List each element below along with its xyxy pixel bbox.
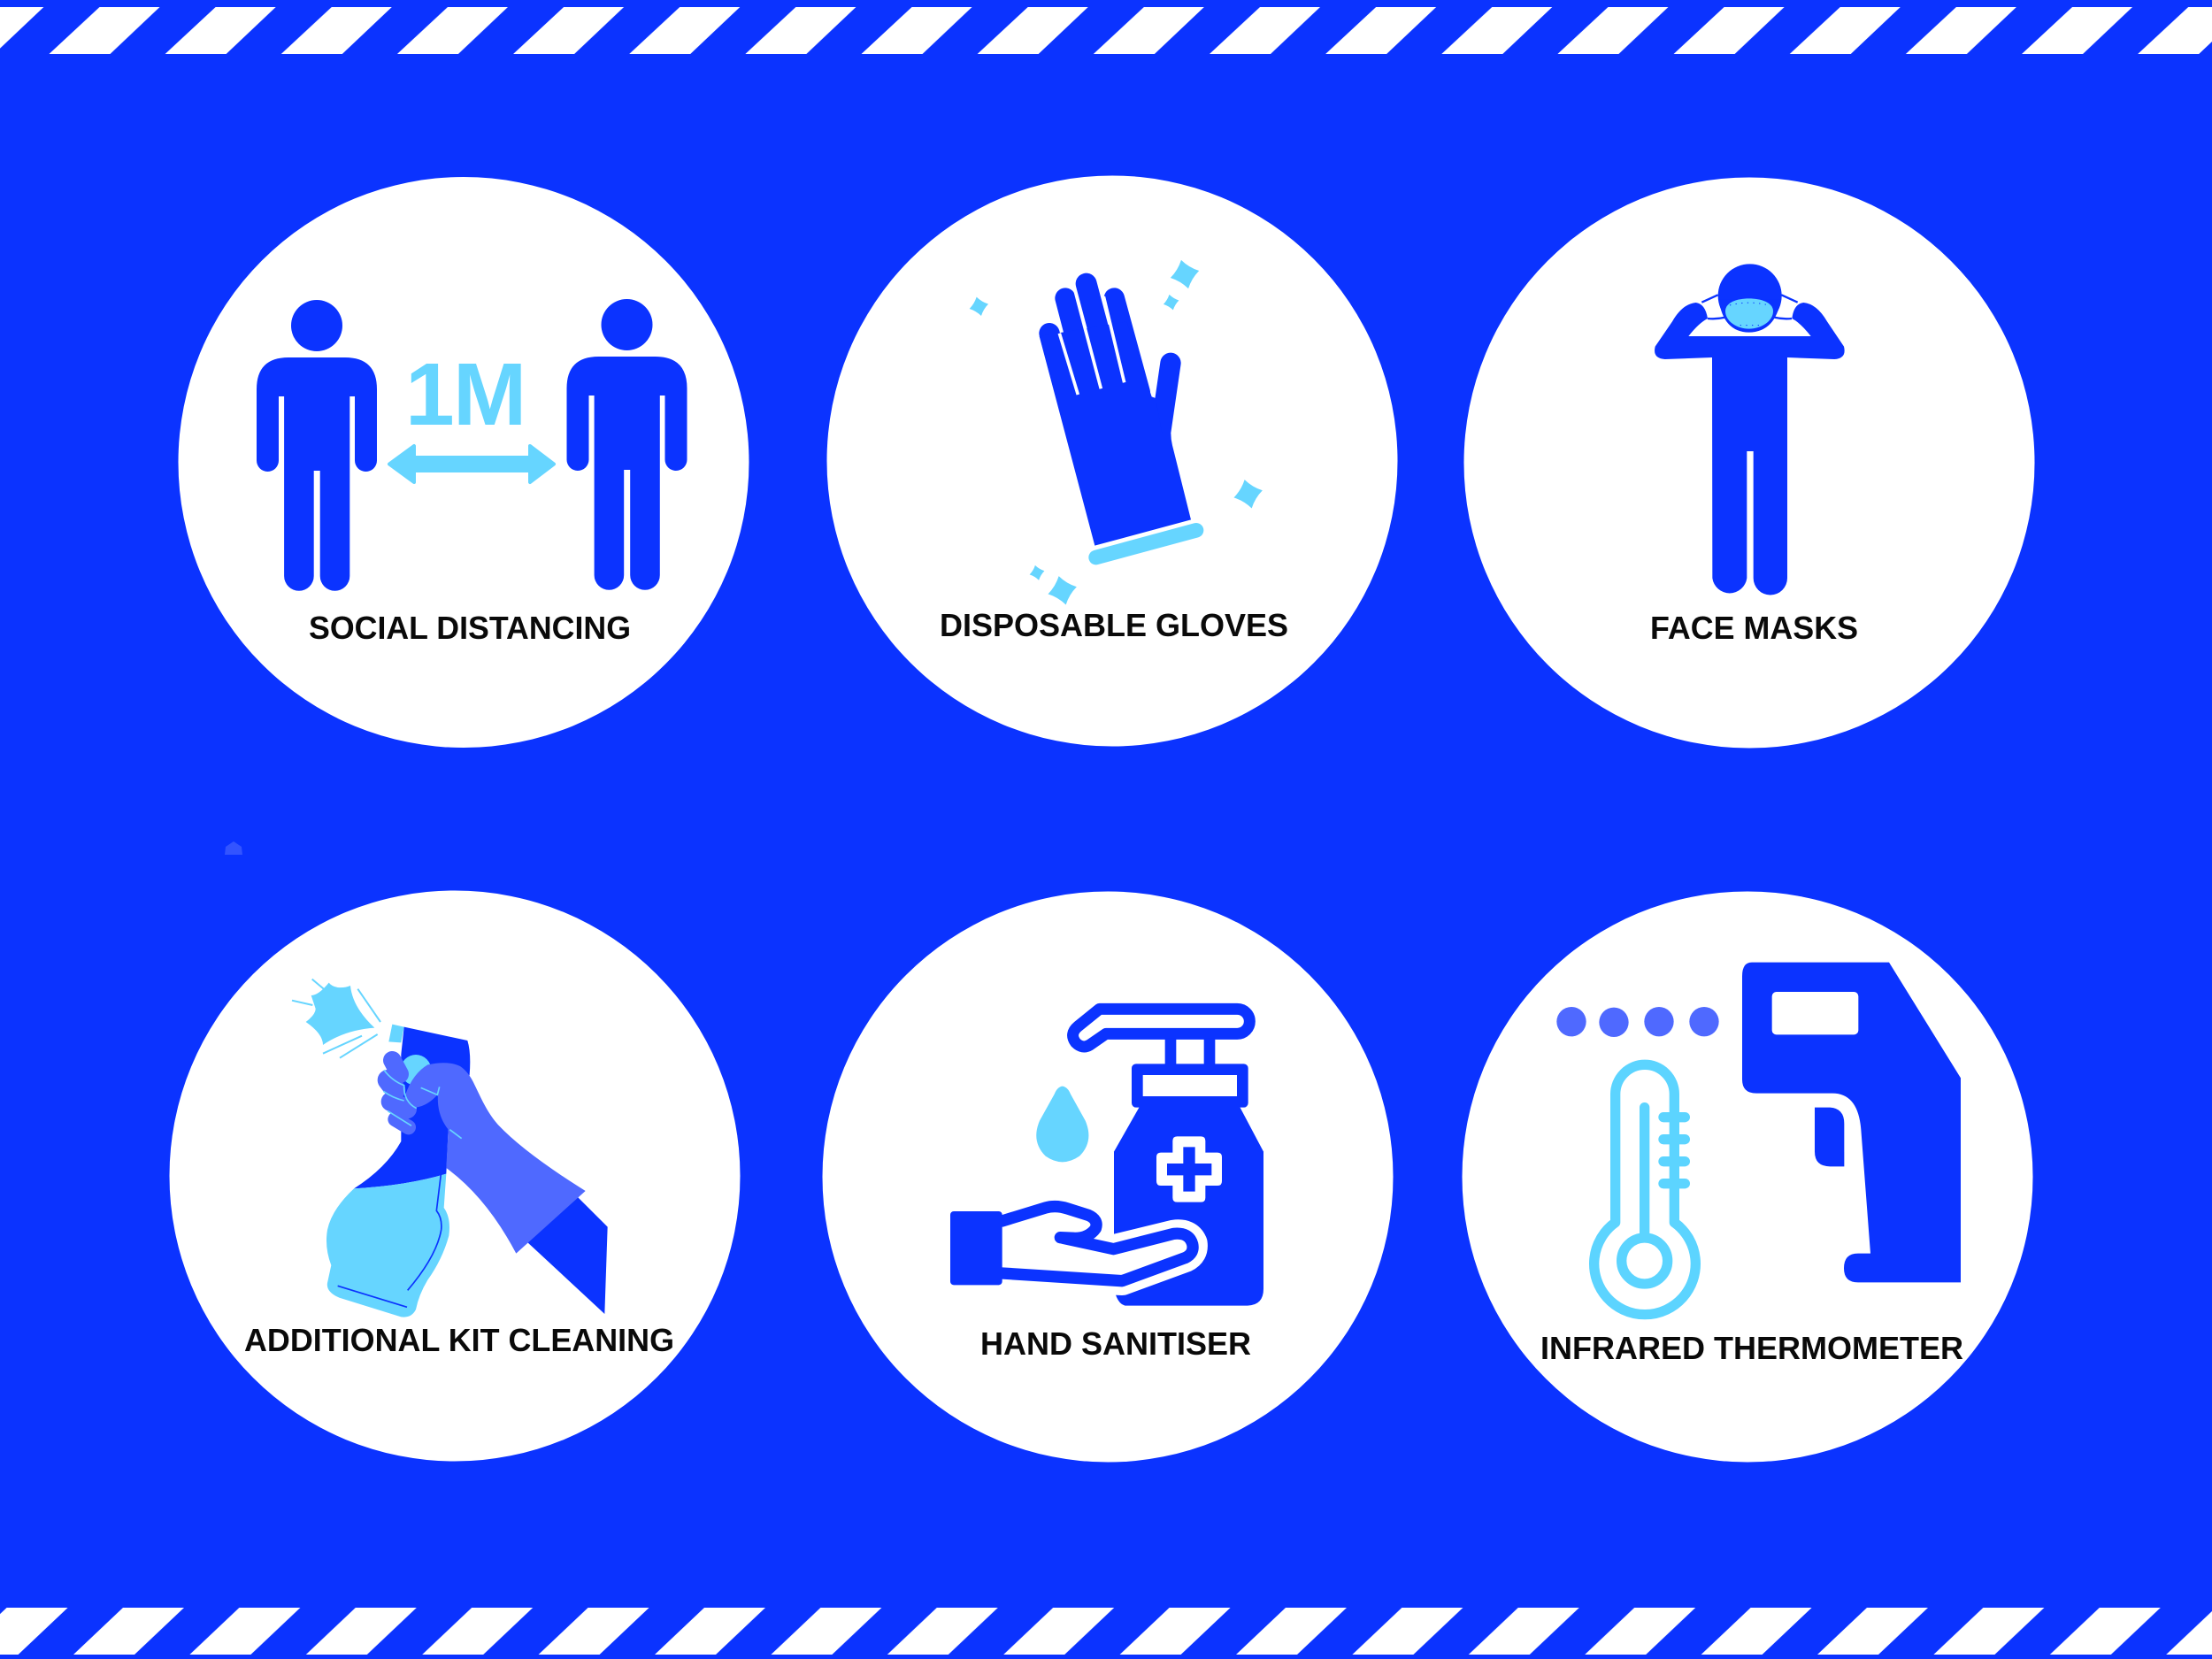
icon: sparkles <box>967 257 1266 609</box>
label: DISPOSABLE GLOVES <box>940 607 1288 643</box>
label: ADDITIONAL KIT CLEANING <box>244 1322 674 1358</box>
label: INFRARED THERMOMETER <box>1540 1330 1963 1366</box>
panel: disposable gloves <box>826 175 1398 747</box>
icon: glove <box>1040 284 1196 557</box>
bottom hazard stripe border <box>0 1608 2212 1655</box>
icon: reading dots <box>1556 1007 1719 1037</box>
label: HAND SANITISER <box>980 1325 1251 1362</box>
distance value: 1 <box>405 345 455 444</box>
label: FACE MASKS <box>1650 610 1858 646</box>
panel: additional kit cleaning <box>170 890 740 1462</box>
small smudge <box>225 841 242 855</box>
icon: person putting on mask <box>1655 264 1845 595</box>
icon: left person <box>257 300 377 591</box>
icon: right person <box>566 299 687 590</box>
icon: hand spraying bottle <box>292 979 608 1317</box>
panel: face masks <box>1463 177 2035 749</box>
panel: hand sanitiser <box>823 892 1393 1462</box>
label: SOCIAL DISTANCING <box>309 610 631 646</box>
icon: infrared gun <box>1742 963 1961 1282</box>
panel: social distancing <box>179 177 749 748</box>
distance value: M <box>453 345 526 444</box>
icon: sanitiser bottle and hand <box>950 1009 1263 1306</box>
top hazard stripe border <box>0 7 2212 54</box>
double arrow <box>389 446 554 482</box>
panel: infrared thermometer <box>1462 892 2033 1462</box>
icon: thermometer <box>1594 1064 1695 1315</box>
